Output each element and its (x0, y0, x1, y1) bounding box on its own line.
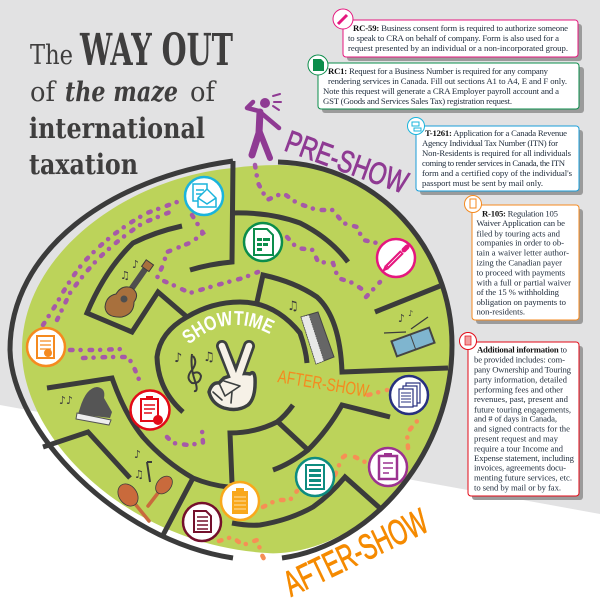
callout: R-105: obligation on payments to (476, 297, 567, 307)
icon: maracas (114, 448, 176, 521)
icon: treble clef and notes: ♪ (174, 351, 182, 366)
icon: red clipboard circle (130, 390, 170, 430)
callout: T-1261: Agency Individual Tax Number (ITN) for (422, 138, 558, 148)
callout: R-105 (464, 196, 583, 324)
title (29, 25, 233, 181)
title: taxation (29, 148, 138, 181)
callout: RC-59: RC-59: Business consent form is required to authorize someone (353, 23, 568, 33)
callout: additional information: performing fees and other (474, 384, 563, 394)
title: The (30, 40, 73, 71)
icon: victory hand (209, 346, 255, 409)
callout: additional information (460, 332, 583, 500)
icon: maroon document circle (183, 503, 221, 541)
callout: additional information: Additional information to (477, 345, 568, 355)
icon: guitar: ♫ (120, 269, 130, 282)
callout: R-105: tain a waiver letter author- (476, 248, 569, 258)
callout: additional information: Expense statement, including (474, 453, 575, 463)
title: the maze (65, 77, 178, 108)
heading: showtime: SHOWTIME (182, 310, 275, 343)
icon: drum (384, 309, 435, 356)
callout: additional information: pany Ownership and Touring (474, 364, 572, 374)
callout: RC-59: request presented by an individual or a non-incorporated group. (348, 43, 568, 53)
icon: singer figure (247, 94, 281, 158)
callout: RC1: rendering services in Canada. Fill out sections A1 to A4, E and F only. (328, 76, 567, 86)
callout: additional information: revenues, past, present and (474, 394, 569, 404)
callout: additional information: and signed contracts for the (474, 424, 570, 434)
icon: piano: ♪♪ (59, 394, 73, 407)
title: of (30, 77, 57, 108)
icon: pencil circle (377, 239, 415, 277)
heading: after-show small: AFTER-SHOW (276, 366, 370, 401)
icon: drum: ♪ (398, 312, 405, 325)
icon: maracas: ♫ (134, 468, 144, 481)
callout: additional information: party information, detailed (474, 375, 568, 385)
callout: R-105: to proceed with payments (476, 267, 566, 277)
heading: pre-show: PRE-SHOW (281, 124, 413, 201)
callout: additional information: to send by mail or by fax. (474, 482, 561, 492)
callout: additional information: future touring engagements, (474, 404, 571, 414)
callout: R-105: non-residents. (476, 307, 525, 317)
icon: keyboard: ♫ (287, 299, 299, 314)
icon: certificate circle (27, 328, 65, 366)
callout: R-105: filed by touring acts and (476, 228, 561, 238)
callout: RC1 (308, 55, 584, 113)
callout: R-105: of the 15 % withholding (476, 287, 560, 297)
maze walls (10, 161, 452, 558)
callout: RC1: GST (Goods and Services Sales Tax) registration request. (323, 96, 512, 106)
callout: R-105: R-105: Regulation 105 (482, 208, 558, 218)
callout: additional information: and # of days in Canada, (474, 414, 557, 424)
callout: additional information: menting future services, etc. (474, 473, 572, 483)
icon: guitar (105, 258, 154, 317)
icon: drum: ♪ (408, 309, 413, 318)
icon: teal form circle (296, 458, 334, 496)
callout: T-1261: Non-Residents is required for all individuals (422, 148, 572, 158)
callout: additional information: present request and may (474, 433, 559, 443)
callout: RC-59 (333, 9, 582, 61)
icon: purple clipboard circle (369, 448, 407, 486)
icon: treble clef and notes (174, 350, 215, 391)
title: WAY OUT (79, 25, 233, 76)
callout: T-1261: coming to render services in Canada, the ITN (422, 158, 566, 168)
icon: envelope circle (185, 177, 223, 215)
maze green floor (22, 165, 452, 553)
footprints: after-show trail (219, 390, 418, 565)
icon: guitar: ♪ (132, 258, 139, 271)
icon: navy documents circle (390, 376, 428, 414)
footprints: pre-show trail (43, 165, 380, 445)
callout: R-105: izing the Canadian payer (476, 257, 562, 267)
callout: RC1: Note this request will generate a CRA Employer payroll account and a (323, 86, 559, 96)
callout: R-105: Waiver Application can be (476, 218, 565, 228)
callout: R-105: with a full or partial waiver (476, 277, 571, 287)
icon: keyboard (287, 299, 334, 364)
icon: piano (59, 387, 112, 425)
callout: RC-59: to speak to CRA on behalf of company. Form is also used for a (348, 33, 559, 43)
callout: additional information: require a tour Income and (474, 443, 564, 453)
title: international (29, 112, 205, 145)
callout: T-1261: passport must be sent by mail only. (422, 178, 543, 188)
callout: RC1: RC1: Request for a Business Number is required for any company (328, 66, 549, 76)
title: of (190, 77, 217, 108)
heading: after-show large: AFTER-SHOW (277, 500, 434, 600)
callout: additional information: be provided includes: com- (474, 355, 565, 365)
callout: T-1261: form and a certified copy of the individual's (422, 168, 573, 178)
icon: green form circle (244, 223, 282, 261)
callout: T-1261: T-1261: Application for a Canada Revenue (425, 128, 567, 138)
icon: gold clipboard circle (221, 482, 259, 520)
callout: T-1261 (408, 118, 583, 195)
callout: additional information: invoices, agreements docu- (474, 463, 566, 473)
callout: R-105: companies in order to ob- (476, 238, 564, 248)
icon: treble clef and notes: ♫ (203, 350, 215, 365)
icon: maracas: ♪ (134, 448, 141, 461)
